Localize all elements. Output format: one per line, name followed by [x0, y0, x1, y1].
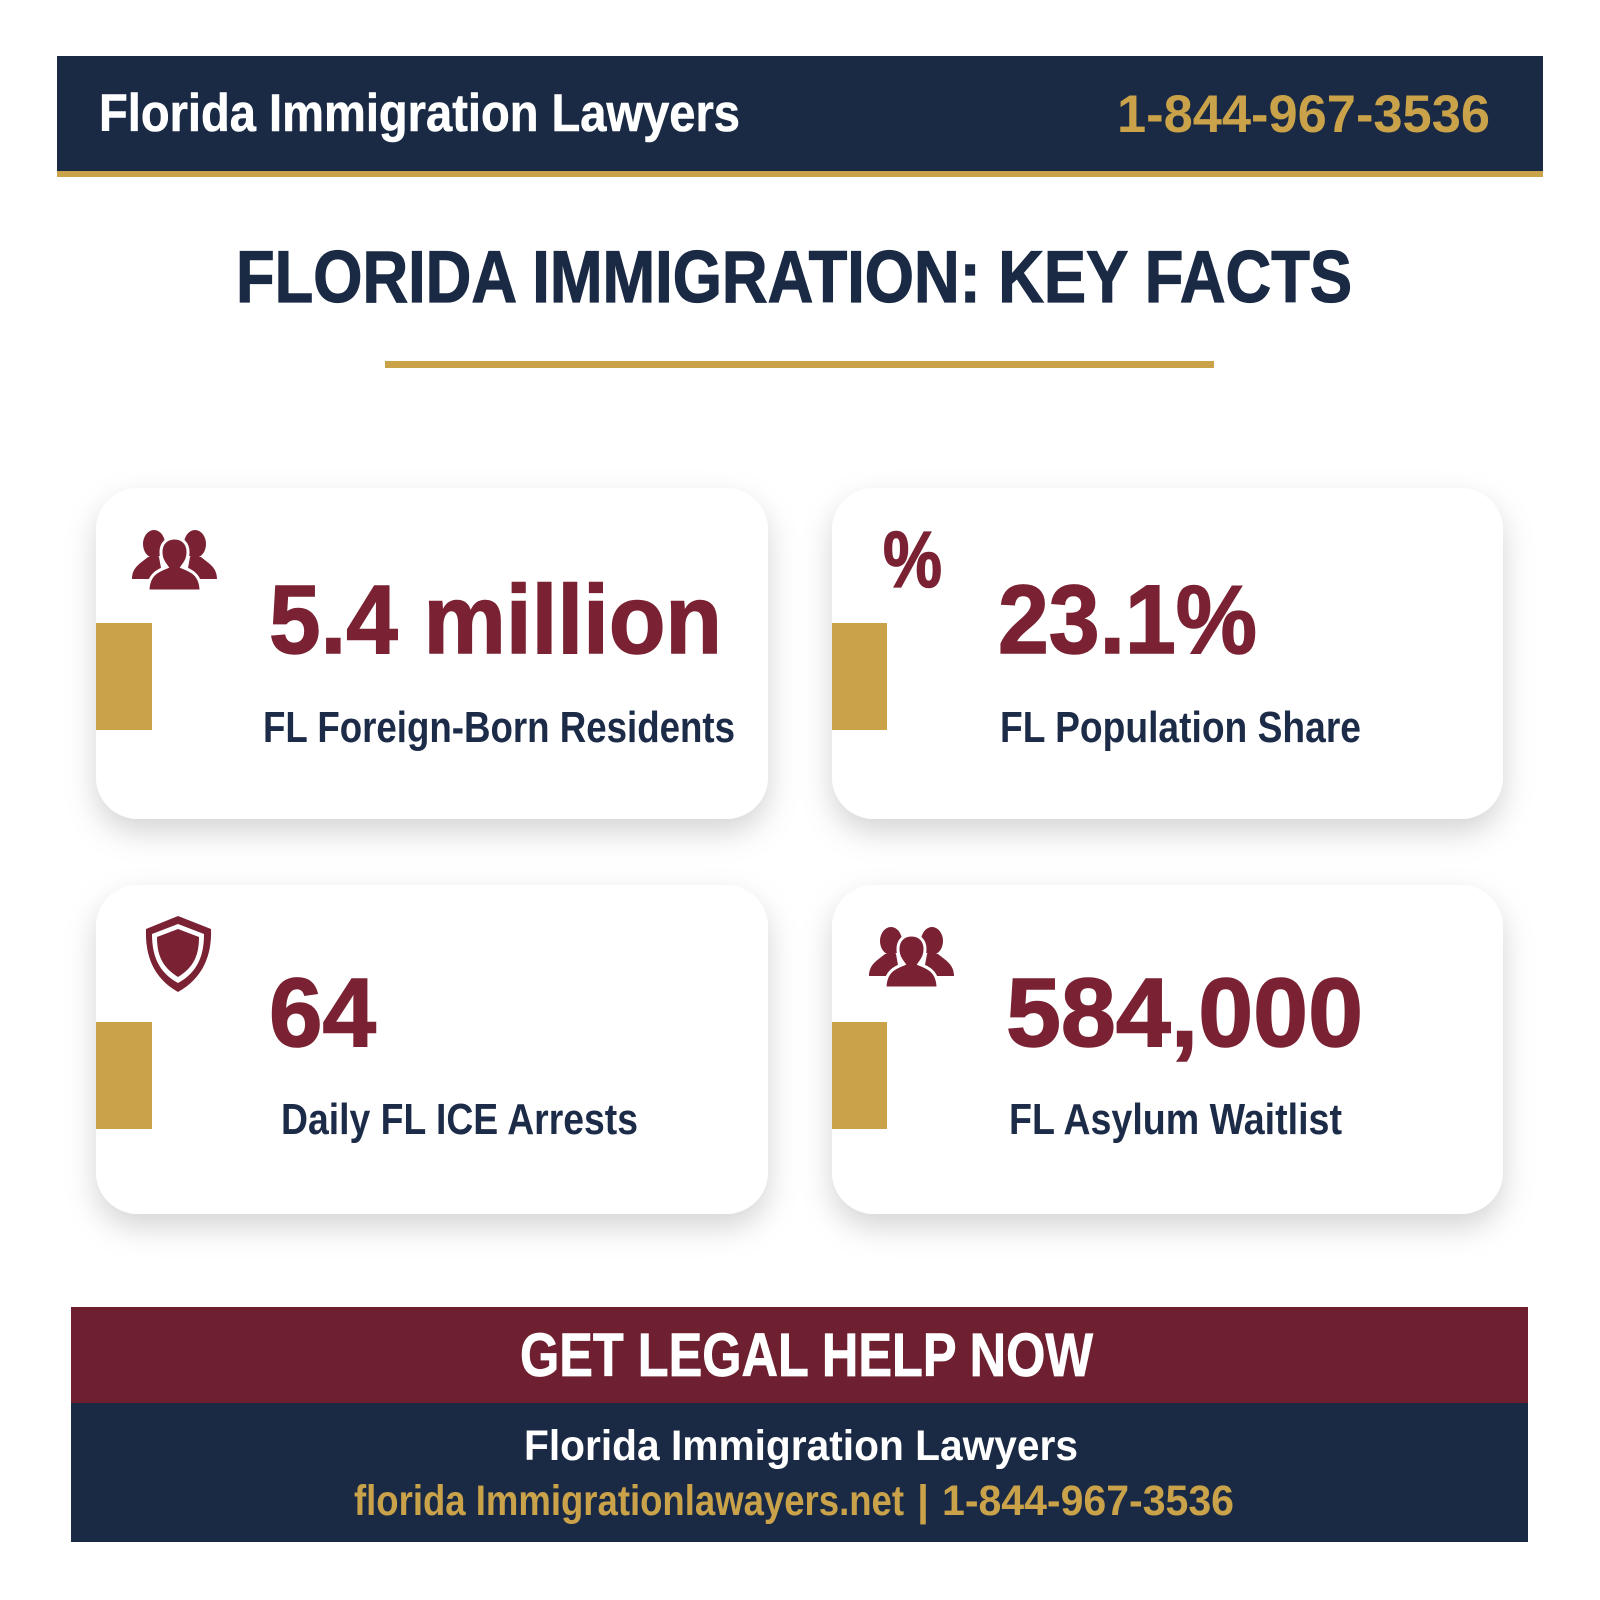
stat value: 5.4 million	[269, 565, 722, 674]
stat value: 64	[269, 958, 376, 1067]
stat value: 584,000	[1006, 958, 1363, 1067]
panel: asylum waitlist	[832, 885, 1503, 1214]
panel: population share	[832, 488, 1503, 819]
icon: people	[132, 530, 217, 591]
header firm name: Florida Immigration Lawyers	[99, 84, 740, 143]
title: FLORIDA IMMIGRATION: KEY FACTS	[236, 237, 1352, 318]
footer heading: GET LEGAL HELP NOW	[520, 1321, 1093, 1389]
stat label: FL Asylum Waitlist	[1009, 1095, 1342, 1144]
stat label: FL Foreign-Born Residents	[263, 703, 735, 752]
footer firm name: Florida Immigration Lawyers	[524, 1422, 1078, 1470]
stat value: 23.1%	[998, 565, 1257, 674]
footer contact line: 1-844-967-3536	[942, 1477, 1234, 1525]
icon: people	[869, 927, 954, 988]
title underline	[385, 361, 1214, 368]
header bar	[57, 56, 1543, 177]
panel: foreign-born residents	[96, 488, 768, 819]
footer contact line: |	[917, 1477, 929, 1525]
stat label: Daily FL ICE Arrests	[281, 1095, 638, 1144]
icon: percent: %	[883, 515, 942, 604]
footer contact line: florida Immigrationlawayers.net	[354, 1477, 904, 1525]
panel: daily ICE arrests	[96, 885, 768, 1214]
stat label: FL Population Share	[1000, 703, 1361, 752]
icon: shield	[146, 916, 211, 992]
header phone number: 1-844-967-3536	[1117, 85, 1490, 144]
footer call to action	[71, 1307, 1528, 1542]
